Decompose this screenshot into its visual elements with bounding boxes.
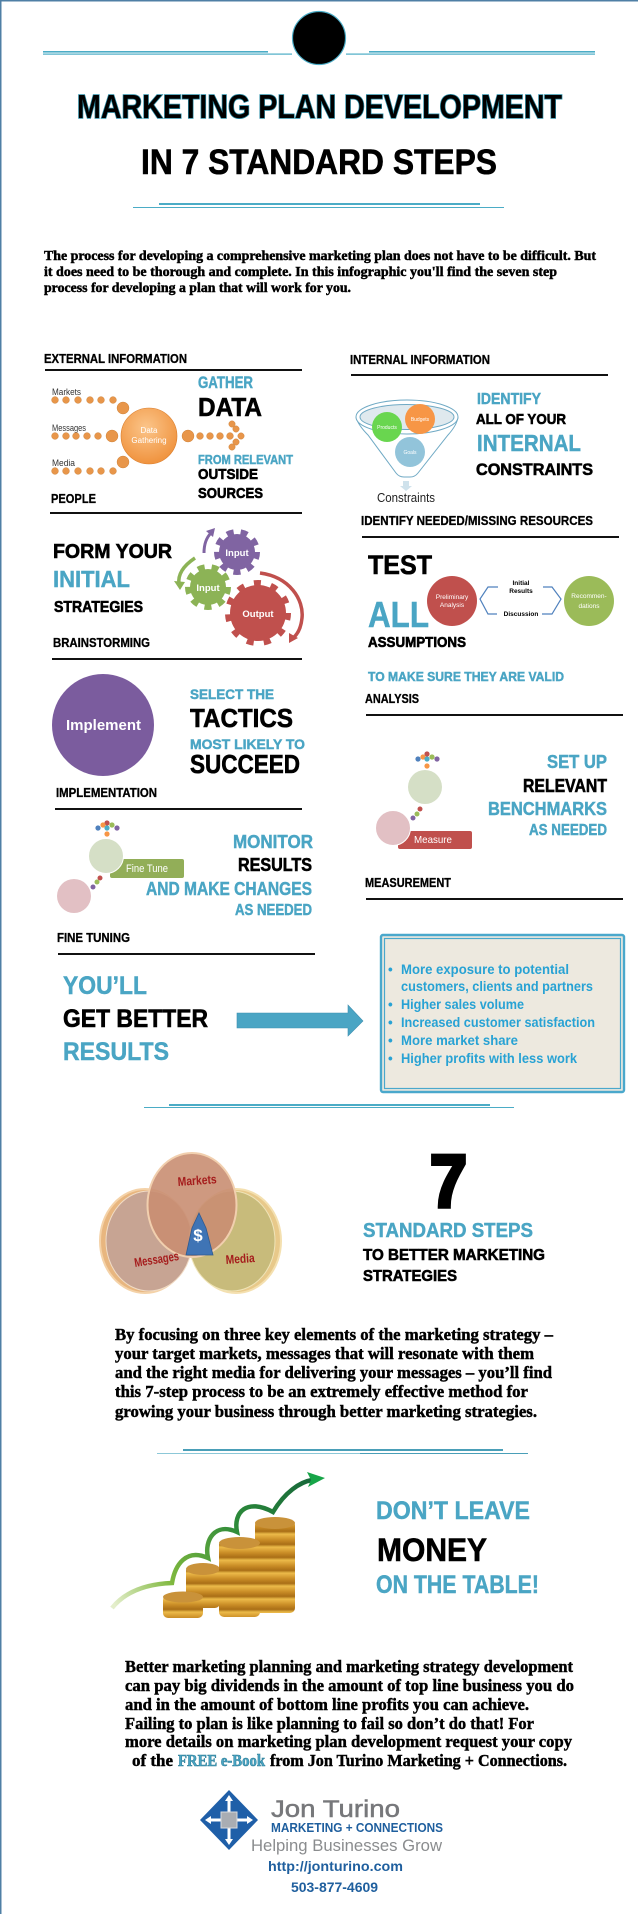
icon: gears [174, 528, 302, 643]
text: identify constraints [476, 391, 593, 479]
callout: benefits list: Higher profits with less work [401, 1051, 577, 1066]
callout: benefits list: • [388, 1051, 393, 1066]
icon: implement circle [52, 674, 154, 776]
text: test all assumptions [368, 550, 564, 684]
diagram: analysis flow: Results [509, 588, 533, 595]
icon: fine tune [57, 820, 184, 913]
growth arrow [112, 1472, 325, 1608]
icon: constraints funnel: Budgets [411, 417, 430, 423]
icon: gears: Input [225, 548, 249, 559]
text: test all assumptions: ALL [368, 594, 429, 635]
icon: constraints funnel [356, 400, 458, 505]
callout: benefits list: • [388, 962, 393, 977]
diagram: analysis flow: Recommen- [571, 593, 607, 600]
text: form your initial strategies [53, 541, 173, 616]
text: monitor results [146, 832, 313, 919]
paragraph: better marketing planning [125, 1657, 574, 1770]
arrow: to results [237, 1005, 363, 1036]
text: set up benchmarks: BENCHMARKS [488, 799, 607, 819]
text: gather data: DATA [198, 392, 262, 422]
text: test all assumptions: TO MAKE SURE THEY ARE VALID [368, 669, 564, 684]
title: MARKETING PLAN DEVELOPMENT [77, 88, 562, 125]
diagram: data gathering: Media [52, 458, 75, 468]
panel: implementation [52, 674, 305, 810]
callout: benefits list: More exposure to potential [401, 962, 569, 977]
big number 7 and caption: TO BETTER MARKETING [363, 1247, 545, 1264]
text: identify constraints: CONSTRAINTS [476, 460, 593, 479]
panel: fine tuning [57, 820, 315, 955]
panel: brainstorming [52, 528, 302, 660]
label: people: PEOPLE [51, 492, 96, 506]
logo: Jon Turino: Helping Businesses Grow [251, 1836, 443, 1855]
callout: benefits list [381, 935, 624, 1092]
icon: constraints funnel: Products [377, 425, 397, 431]
header ornament [43, 12, 595, 64]
logo: Jon Turino: Jon Turino [271, 1796, 400, 1823]
diagram: analysis flow: Preliminary [436, 594, 469, 601]
heading: external information: EXTERNAL INFORMATION [44, 352, 187, 366]
coin stacks [163, 1517, 295, 1618]
label: fine tuning: FINE TUNING [57, 931, 130, 945]
text: gather data: SOURCES [198, 485, 263, 502]
big number 7 and caption: STANDARD STEPS [363, 1220, 533, 1242]
intro paragraph: process for developing a plan that will work for you. [44, 280, 351, 295]
text: set up benchmarks: AS NEEDED [529, 822, 607, 839]
callout: benefits list: Higher sales volume [401, 997, 524, 1012]
text: set up benchmarks: RELEVANT [523, 776, 607, 796]
icon: venn diagram [100, 1153, 281, 1293]
text: form your initial strategies: INITIAL [53, 566, 130, 592]
subtitle: IN 7 STANDARD STEPS [141, 143, 497, 182]
text: gather data [198, 374, 293, 502]
paragraph: better marketing planning: Better marketing planning and marketing strategy development [125, 1657, 573, 1676]
label: identify needed resources: IDENTIFY NEEDED/MISSING RESOURCES [361, 514, 593, 528]
text: set up benchmarks [488, 752, 607, 839]
text: monitor results: MONITOR [233, 832, 313, 852]
logo: Jon Turino [200, 1790, 443, 1895]
text: monitor results: AS NEEDED [235, 902, 312, 919]
paragraph: better marketing planning: can pay big dividends in the amount of top line business you do [125, 1676, 574, 1695]
paragraph: three key elements: By focusing on three key elements of the marketing strategy – [115, 1325, 554, 1344]
text: test all assumptions: TEST [368, 550, 432, 580]
title divider [133, 203, 504, 208]
text: monitor results: RESULTS [238, 855, 312, 875]
panel: measurement [365, 751, 623, 900]
text: gather data: FROM RELEVANT [198, 452, 293, 467]
label: brainstorming: BRAINSTORMING [53, 636, 150, 650]
paragraph: better marketing planning: from Jon Turino Marketing + Connections. [270, 1751, 567, 1770]
callout: benefits list: • [388, 1033, 393, 1048]
diagram: data gathering [52, 387, 244, 474]
intro paragraph: it does need to be thorough and complete. In this infographic you'll find the seven step [44, 264, 557, 279]
diagram: analysis flow: dations [579, 603, 600, 610]
logo: Jon Turino: http://jonturino.com [268, 1858, 403, 1874]
logo: Jon Turino: MARKETING + CONNECTIONS [271, 1820, 443, 1835]
text: you'll get better results: GET BETTER [63, 1005, 208, 1033]
text: form your initial strategies: FORM YOUR [53, 541, 173, 563]
paragraph: three key elements: and the right media for delivering your messages – you’ll find [115, 1363, 552, 1382]
text: don't leave money on the table [376, 1497, 539, 1599]
icon: measure: Measure [414, 834, 452, 846]
icon: venn diagram: Markets [177, 1172, 217, 1189]
big number 7 and caption: 7 [430, 1140, 467, 1223]
text: you'll get better results: RESULTS [63, 1038, 169, 1066]
callout: benefits list: • [388, 997, 393, 1012]
icon: gears: Output [242, 609, 274, 620]
text: don't leave money on the table: DON’T LEAVE [376, 1497, 530, 1525]
panel: analysis [365, 550, 623, 716]
diagram: analysis flow [427, 576, 614, 626]
text: gather data: OUTSIDE [198, 466, 258, 483]
paragraph: better marketing planning: more details on marketing plan development request your copy [125, 1732, 573, 1751]
icon: gears: Input [196, 583, 220, 594]
icon: implement circle: Implement [66, 717, 141, 734]
text: select the tactics: SUCCEED [190, 749, 300, 779]
callout: benefits list: More market share [401, 1033, 518, 1048]
text: monitor results: AND MAKE CHANGES [146, 879, 312, 899]
text: identify constraints: IDENTIFY [477, 391, 541, 408]
paragraph: three key elements: growing your business through better marketing strategies. [115, 1402, 537, 1421]
paragraph: better marketing planning: of the [132, 1751, 173, 1770]
text: don't leave money on the table: MONEY [377, 1532, 487, 1568]
text: you'll get better results: YOU’LL [63, 972, 147, 1000]
big number 7 and caption: STRATEGIES [363, 1268, 457, 1285]
text: select the tactics: MOST LIKELY TO [190, 736, 305, 752]
text: gather data: GATHER [198, 374, 253, 392]
icon: venn diagram: Messages [133, 1249, 180, 1270]
paragraph: better marketing planning: Failing to plan is like planning to fail so don’t do that! For [125, 1714, 534, 1733]
icon: venn diagram: $ [193, 1226, 203, 1245]
text: set up benchmarks: SET UP [547, 752, 607, 772]
intro paragraph [44, 248, 597, 295]
icon: coins and growth arrow [112, 1472, 325, 1618]
panel: internal information [350, 353, 619, 538]
diagram: analysis flow: Discussion [504, 611, 538, 618]
text: select the tactics [190, 686, 305, 779]
diagram: data gathering: Data [141, 426, 158, 435]
paragraph: better marketing planning: and in the amount of bottom line profits you can achieve. [125, 1695, 529, 1714]
logo: Jon Turino: 503-877-4609 [291, 1879, 378, 1895]
diagram: data gathering: Gathering [131, 436, 167, 445]
text: select the tactics: TACTICS [190, 703, 293, 733]
label: implementation: IMPLEMENTATION [56, 786, 157, 800]
icon: diamond mark [200, 1790, 258, 1850]
label: measurement: MEASUREMENT [365, 876, 451, 890]
icon: venn diagram: Media [225, 1251, 256, 1267]
diagram: data gathering: Markets [52, 387, 81, 397]
diagram: data gathering: Messages [52, 423, 86, 433]
icon: constraints funnel: Constraints [377, 490, 435, 505]
diagram: analysis flow: Analysis [440, 602, 465, 609]
text: don't leave money on the table: ON THE TABLE! [376, 1571, 539, 1599]
text: test all assumptions: ASSUMPTIONS [368, 635, 466, 651]
text: identify constraints: ALL OF YOUR [476, 411, 566, 428]
paragraph: three key elements [115, 1325, 554, 1421]
text: select the tactics: SELECT THE [190, 686, 274, 702]
callout: benefits list: customers, clients and partners [401, 979, 593, 994]
intro paragraph: The process for developing a comprehensive marketing plan does not have to be difficult. But [44, 248, 597, 263]
heading: internal information: INTERNAL INFORMATION [350, 353, 490, 367]
panel: external information [44, 352, 302, 514]
text: form your initial strategies: STRATEGIES [54, 599, 143, 616]
diagram: analysis flow: Initial [513, 580, 530, 587]
paragraph: better marketing planning: FREE e-Book [178, 1751, 266, 1770]
callout: benefits list: Increased customer satisfaction [401, 1015, 595, 1030]
paragraph: three key elements: your target markets, messages that will resonate with them [115, 1344, 534, 1363]
text: you'll get better results [63, 972, 208, 1066]
big number 7 and caption [363, 1140, 545, 1285]
icon: constraints funnel: Goals [403, 450, 417, 456]
callout: benefits list: • [388, 1015, 393, 1030]
divider [157, 1449, 528, 1454]
text: identify constraints: INTERNAL [477, 430, 581, 456]
icon: measure [376, 751, 472, 849]
icon: fine tune: Fine Tune [126, 863, 168, 875]
divider [144, 1104, 514, 1108]
label: analysis: ANALYSIS [365, 692, 419, 706]
paragraph: three key elements: this 7-step process to be an extremely effective method for [115, 1382, 528, 1401]
